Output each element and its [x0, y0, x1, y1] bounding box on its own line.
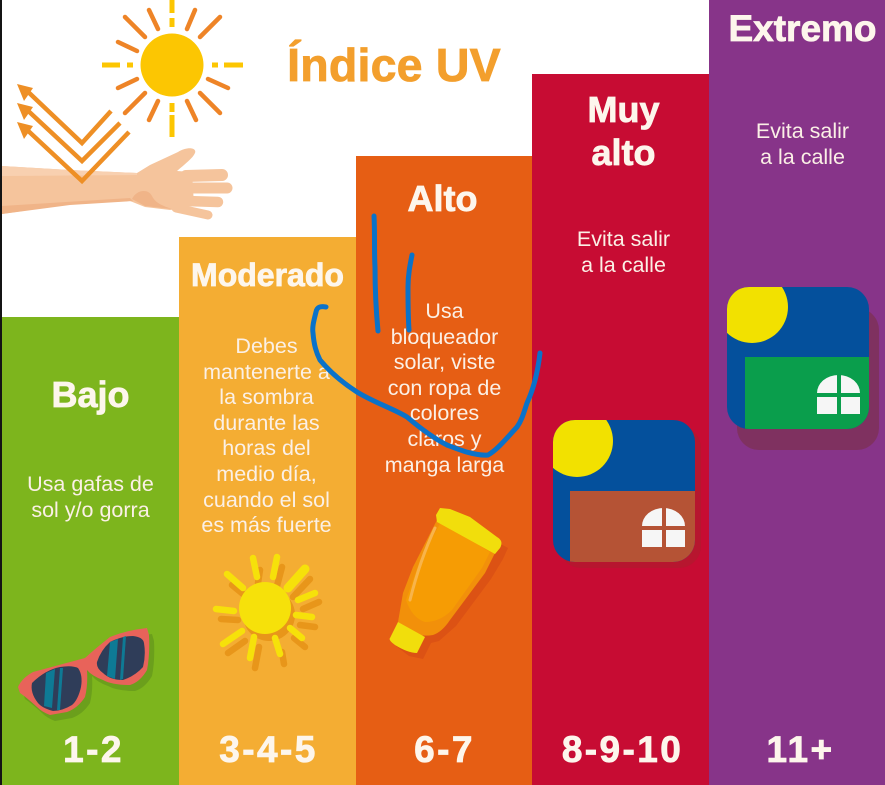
text: Extremo advice: a la calle — [760, 145, 845, 169]
panel: Muy alto column — [532, 74, 709, 785]
panel: Bajo column — [2, 317, 179, 785]
icon: sun with rays — [102, 0, 243, 137]
text: Alto advice: bloqueador — [391, 325, 498, 349]
text: Extremo advice — [756, 119, 849, 169]
icon: house card, Muy alto — [553, 420, 701, 568]
panel: Moderado column — [179, 237, 356, 785]
panel: left edge — [0, 0, 2, 785]
icon: arm and hand — [2, 148, 227, 215]
text: Muy alto advice — [577, 227, 670, 277]
text: Moderado advice: medio día, — [216, 462, 317, 486]
heading: Moderado: Moderado — [191, 257, 344, 293]
heading: Muy alto: Muy — [588, 89, 660, 130]
number: 6-7: 6-7 — [414, 729, 475, 770]
text: Moderado advice: es más fuerte — [201, 513, 332, 537]
icon: house card, Extremo — [727, 287, 879, 450]
text: Alto advice: manga larga — [385, 453, 504, 477]
text: Alto advice: con ropa de — [388, 376, 501, 400]
text: Bajo advice — [27, 472, 154, 522]
icon: sunglasses — [18, 628, 154, 721]
text: Alto advice: Usa — [425, 299, 464, 323]
text: Muy alto advice: Evita salir — [577, 227, 670, 251]
icon: small sun — [216, 557, 319, 668]
heading: Extremo: Extremo — [728, 8, 877, 49]
number: 1-2: 1-2 — [63, 729, 124, 770]
text: Alto advice: colores — [410, 401, 479, 425]
text: Alto advice: claros y — [407, 427, 482, 451]
number: 8-9-10: 8-9-10 — [562, 729, 683, 770]
text: Moderado advice — [201, 334, 332, 537]
heading: Muy alto: alto — [591, 132, 656, 173]
text: Alto advice: solar, viste — [394, 350, 495, 374]
text: Bajo advice: sol y/o gorra — [31, 498, 150, 522]
heading: Alto: Alto — [408, 178, 477, 219]
text: Extremo advice: Evita salir — [756, 119, 849, 143]
number: 3-4-5: 3-4-5 — [219, 729, 318, 770]
text: Moderado advice: la sombra — [219, 385, 314, 409]
text: Moderado advice: durante las — [213, 411, 320, 435]
text: Moderado advice: Debes — [235, 334, 298, 358]
heading: Muy alto — [588, 89, 660, 173]
text: Moderado advice: horas del — [222, 436, 311, 460]
number: 11+: 11+ — [767, 729, 834, 770]
panel: Alto column — [356, 156, 533, 785]
icon: sunscreen tube — [390, 508, 508, 659]
text: Alto advice — [385, 299, 504, 477]
text: Muy alto advice: a la calle — [581, 253, 666, 277]
panel: Extremo column — [709, 0, 885, 785]
icon: reflected ray arrows — [17, 84, 129, 181]
text: Bajo advice: Usa gafas de — [27, 472, 154, 496]
title: Índice UV — [287, 39, 501, 91]
text: Moderado advice: mantenerte a — [203, 360, 330, 384]
heading: Bajo: Bajo — [51, 374, 130, 415]
text: Moderado advice: cuando el sol — [203, 488, 330, 512]
